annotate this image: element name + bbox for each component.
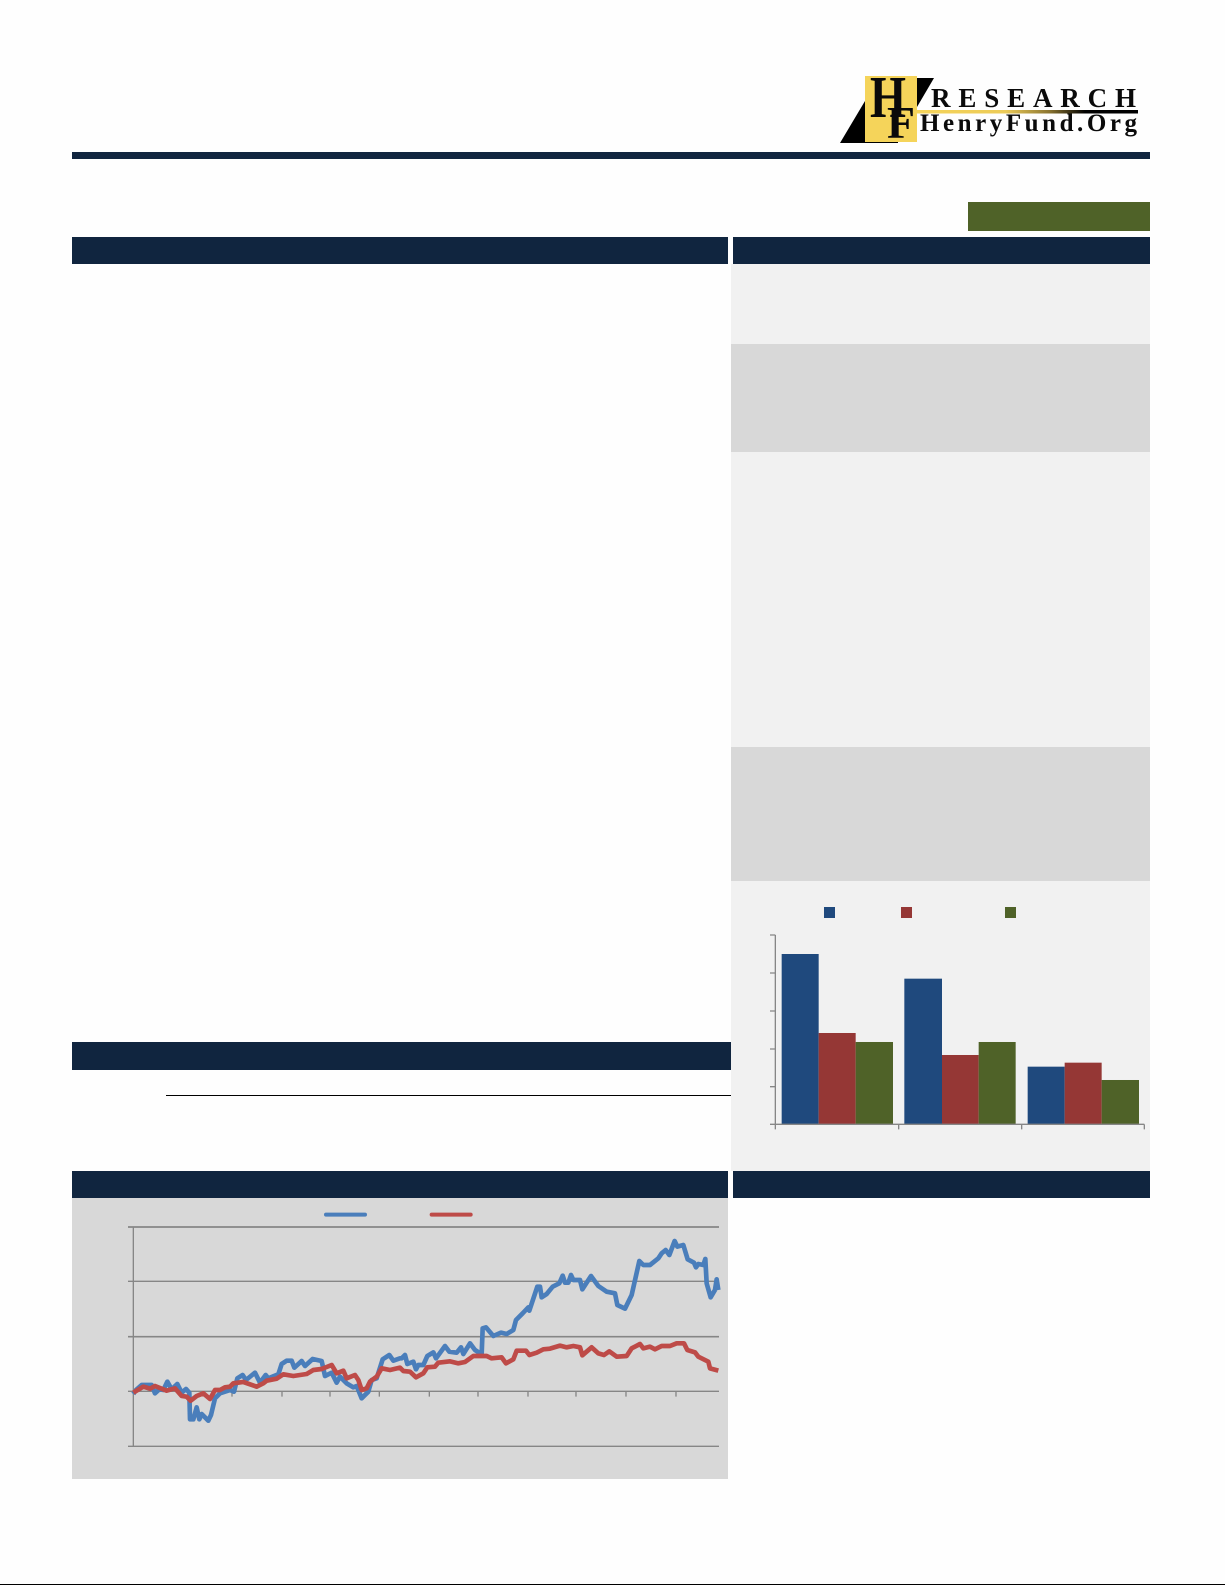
- series: index: [133, 1343, 718, 1401]
- bars: [782, 954, 1139, 1124]
- section header: left middle: [72, 1042, 731, 1070]
- legend lines: [326, 1209, 471, 1221]
- panel: right band 2: [731, 344, 1150, 452]
- logo: Henry Fund Research: [840, 70, 1138, 148]
- rating badge: [968, 202, 1150, 231]
- panel: right band 4: [731, 747, 1150, 881]
- page bottom rule: [0, 1584, 1225, 1585]
- logo: Henry Fund Research: RESEARCH: [931, 83, 1136, 113]
- top header rule: [72, 152, 1150, 159]
- series: stock: [133, 1241, 718, 1421]
- legend swatches: [824, 907, 1016, 918]
- logo: Henry Fund Research: HenryFund.Org: [920, 110, 1138, 137]
- section header: left top: [72, 237, 728, 264]
- panel: right band 3: [731, 452, 1150, 747]
- panel: right band 1: [731, 264, 1150, 344]
- axes: [770, 935, 1144, 1129]
- table header rule: [166, 1095, 731, 1096]
- section header: right bottom: [733, 1171, 1150, 1198]
- panel: bar chart background: [731, 881, 1150, 1171]
- section header: left bottom: [72, 1171, 728, 1198]
- logo: Henry Fund Research: F: [887, 97, 915, 148]
- section header: right top: [733, 237, 1150, 264]
- panel: line chart background: [72, 1198, 728, 1479]
- gridlines and axes: [128, 1227, 719, 1446]
